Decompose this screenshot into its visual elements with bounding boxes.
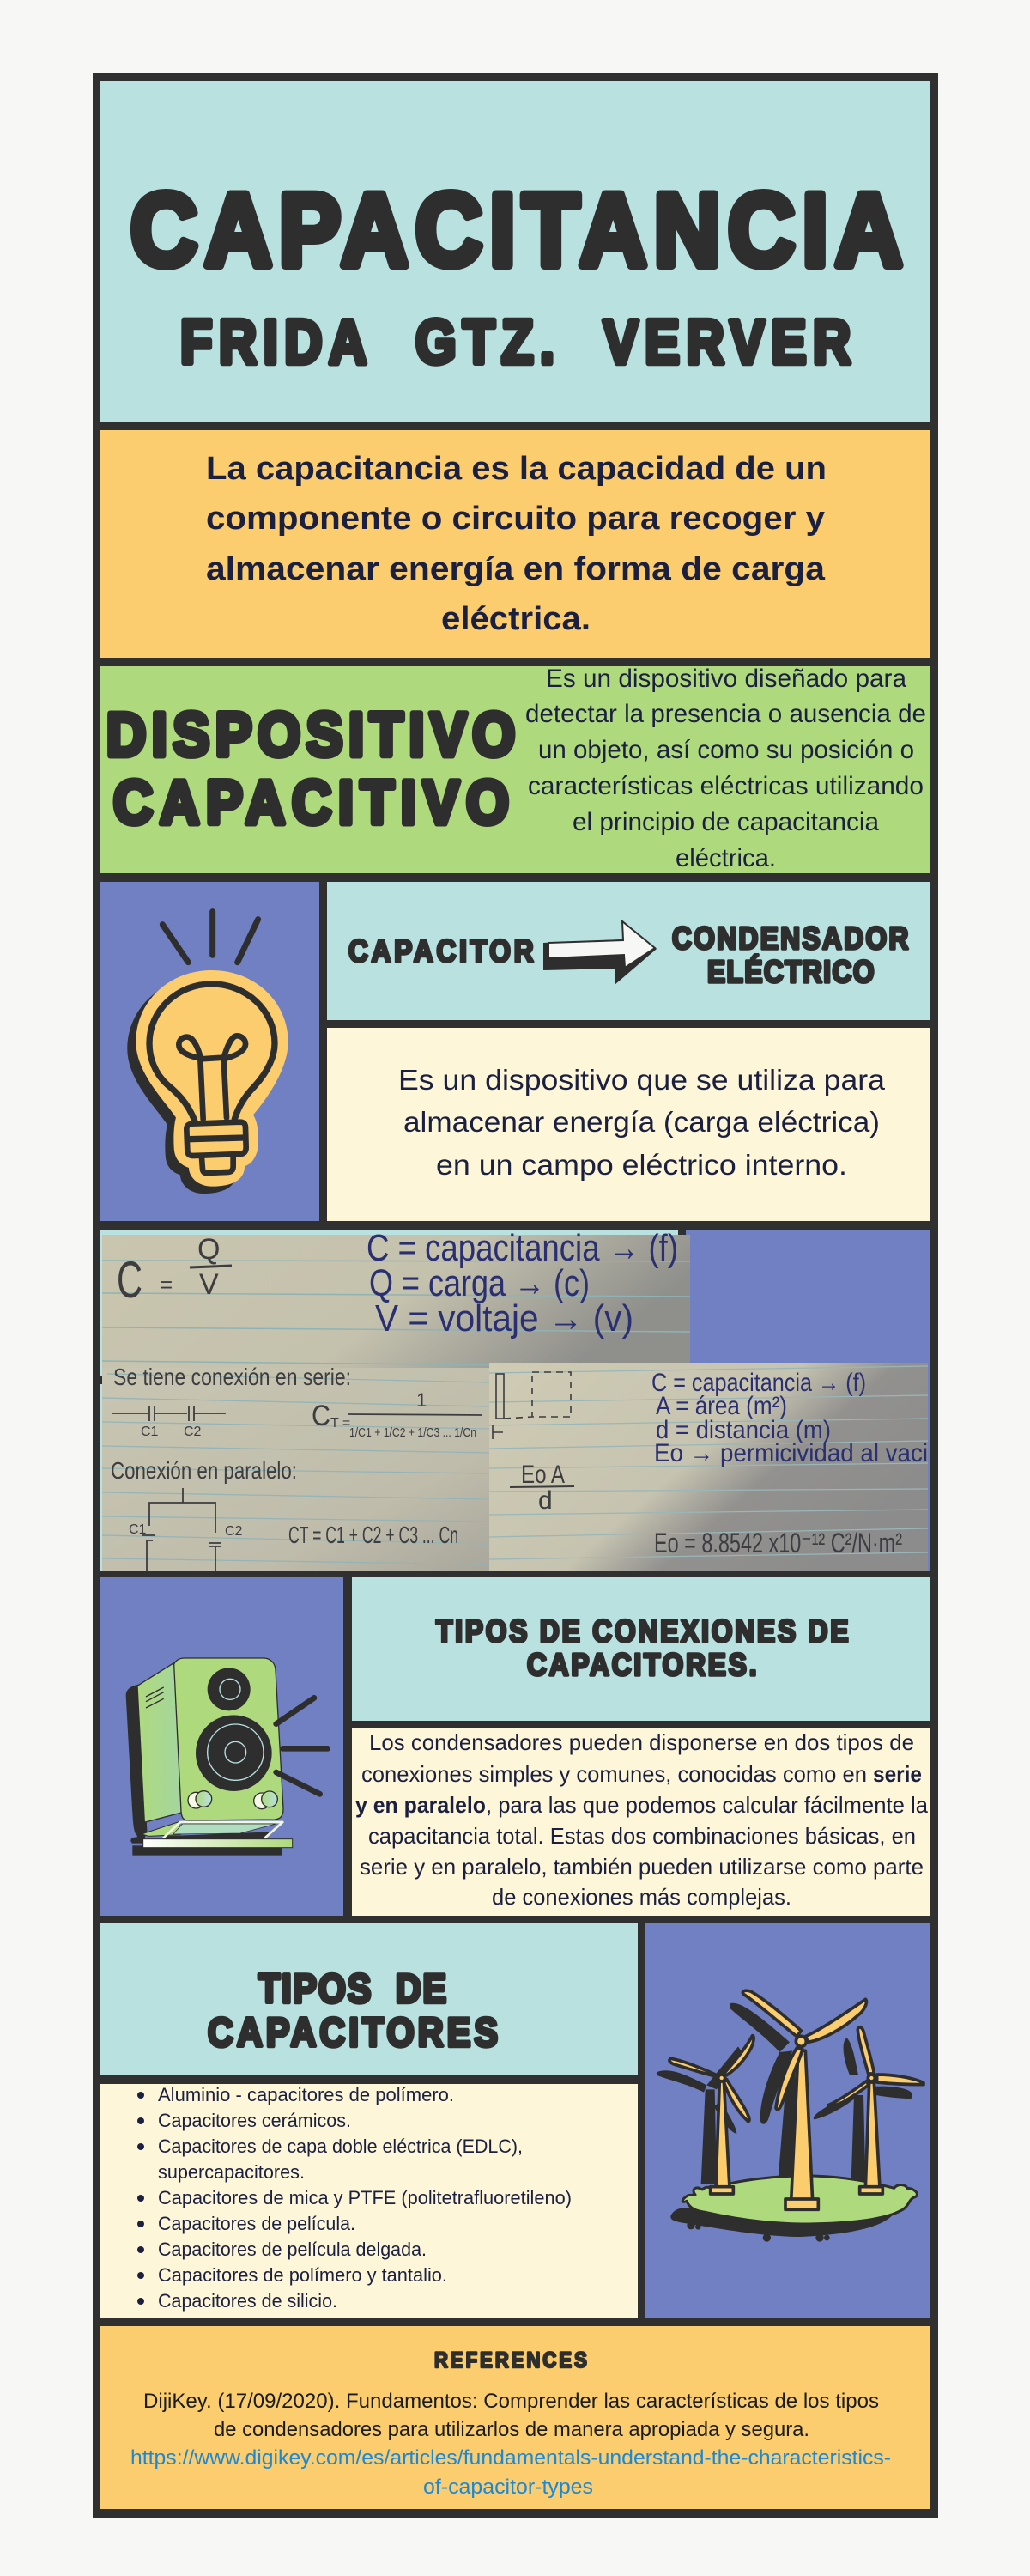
legend: C A d units bbox=[651, 1369, 928, 1467]
definition text: almacenar energía en forma de carga bbox=[206, 551, 826, 587]
formula: C = Q / V bbox=[117, 1233, 232, 1309]
note: series connection: 1/C1 + 1/C2 + 1/C3 ... 1/Cn bbox=[349, 1425, 476, 1440]
legend: C Q V units: Q = carga → (c) bbox=[369, 1262, 590, 1304]
heading: tipos de conexiones: TIPOS DE CONEXIONES DE bbox=[436, 1614, 848, 1649]
panel: formula backgrounds bbox=[93, 1230, 930, 1571]
list items bbox=[158, 2084, 572, 2312]
note: series connection bbox=[112, 1364, 482, 1440]
formula: C = Q / V: C bbox=[117, 1251, 142, 1309]
paragraph bbox=[355, 1729, 929, 1910]
definition text: La capacitancia es la capacidad de un bbox=[206, 451, 827, 487]
icon: light bulb bbox=[127, 912, 288, 1194]
label: condensador electrico bbox=[672, 921, 908, 989]
panel: wind turbines bbox=[645, 1923, 930, 2318]
note: parallel connection: CT = C1 + C2 + C3 ... Cn bbox=[288, 1522, 458, 1548]
list items: supercapacitores. bbox=[158, 2161, 305, 2183]
legend: C Q V units bbox=[367, 1227, 678, 1340]
legend: C A d units: d = distancia (m) bbox=[656, 1416, 831, 1444]
note: series connection: C1 bbox=[141, 1425, 159, 1439]
paragraph: serie y en paralelo, también pueden utilizarse como parte bbox=[360, 1854, 924, 1880]
heading: dispositivo capacitivo bbox=[106, 702, 515, 837]
list items: Capacitores de silicio. bbox=[158, 2290, 337, 2312]
panel: title bbox=[100, 81, 930, 422]
sketch: parallel plates bbox=[493, 1372, 571, 1439]
panel: capacitor description bbox=[327, 1028, 930, 1221]
paragraph: capacitancia total. Estas dos combinaciones básicas, en bbox=[368, 1823, 916, 1849]
heading: tipos de conexiones bbox=[436, 1614, 848, 1682]
citation: de condensadores para utilizarlos de manera apropiada y segura. bbox=[214, 2418, 809, 2441]
paragraph: conexiones simples y comunes, conocidas como en bbox=[361, 1761, 867, 1787]
panel: speaker bbox=[100, 1577, 343, 1916]
paragraph: , para las que podemos calcular fácilmente la bbox=[486, 1792, 929, 1818]
outer dark frame bbox=[93, 73, 938, 2518]
note: parallel connection: C1 bbox=[129, 1522, 147, 1537]
description text: Es un dispositivo que se utiliza para bbox=[398, 1064, 886, 1096]
description text: el principio de capacitancia bbox=[573, 808, 879, 836]
link bbox=[130, 2446, 891, 2499]
icon: speaker bbox=[126, 1658, 328, 1856]
legend: C Q V units: V = voltaje → (v) bbox=[375, 1297, 633, 1340]
citation bbox=[143, 2390, 879, 2441]
description text: almacenar energía (carga eléctrica) bbox=[403, 1106, 880, 1138]
note: parallel connection bbox=[111, 1457, 458, 1571]
panel: light bulb bbox=[100, 882, 319, 1221]
panel: references bbox=[100, 2326, 930, 2509]
note: parallel connection: C2 bbox=[225, 1524, 243, 1539]
heading: references: REFERENCES bbox=[434, 2348, 587, 2372]
panel: dispositivo capacitivo bbox=[100, 665, 930, 873]
formula: Eo A / d bbox=[510, 1461, 574, 1515]
label: condensador electrico: ELÉCTRICO bbox=[707, 955, 874, 989]
list items: Capacitores de mica y PTFE (politetrafluoretileno) bbox=[158, 2187, 572, 2208]
description text: Es un dispositivo diseñado para bbox=[546, 665, 906, 693]
formula: C = Q / V: = bbox=[160, 1272, 173, 1297]
note: series connection: T = bbox=[330, 1416, 350, 1431]
arrow bbox=[543, 921, 657, 985]
photo: series and parallel notes bbox=[102, 1364, 489, 1571]
heading: dispositivo capacitivo: DISPOSITIVO bbox=[106, 702, 515, 769]
description text: eléctrica. bbox=[676, 844, 776, 872]
citation: DijiKey. (17/09/2020). Fundamentos: Comprender las características de los tipos bbox=[143, 2390, 879, 2413]
note: series connection: 1 bbox=[416, 1389, 427, 1411]
panel: definition bbox=[100, 430, 930, 658]
paragraph: Los condensadores pueden disponerse en dos tipos de bbox=[369, 1729, 914, 1755]
panel: capacitor equals condensador bbox=[327, 882, 930, 1020]
label: capacitor: CAPACITOR bbox=[348, 934, 534, 969]
list items: Capacitores de película delgada. bbox=[158, 2239, 427, 2260]
formula: Eo A / d: Eo A bbox=[521, 1461, 565, 1489]
author: FRIDA GTZ. VERVER bbox=[180, 308, 851, 377]
panel: connection types heading bbox=[352, 1577, 930, 1721]
definition text: componente o circuito para recoger y bbox=[206, 501, 825, 537]
heading: tipos de capacitores: TIPOS DE bbox=[258, 1967, 446, 2012]
label: condensador electrico: CONDENSADOR bbox=[672, 921, 908, 956]
legend: C A d units: C = capacitancia → (f) bbox=[651, 1369, 866, 1397]
list items: Capacitores cerámicos. bbox=[158, 2110, 351, 2131]
note: series connection: Se tiene conexión en serie: bbox=[113, 1364, 351, 1390]
heading: dispositivo capacitivo: CAPACITIVO bbox=[113, 769, 509, 837]
link: of-capacitor-types bbox=[423, 2476, 593, 2499]
formula: C = Q / V: Q bbox=[197, 1233, 220, 1266]
paragraph: y en paralelo bbox=[355, 1792, 486, 1818]
bullets bbox=[137, 2092, 144, 2305]
description text bbox=[398, 1064, 886, 1181]
title: CAPACITANCIA bbox=[130, 173, 902, 288]
description text: detectar la presencia o ausencia de bbox=[525, 700, 926, 728]
icon: wind turbines bbox=[657, 1990, 924, 2242]
legend: C Q V units: C = capacitancia → (f) bbox=[367, 1227, 678, 1269]
note: parallel connection: Conexión en paralelo: bbox=[111, 1457, 297, 1484]
photo: parallel plate notes bbox=[489, 1363, 928, 1571]
description text: en un campo eléctrico interno. bbox=[436, 1149, 847, 1181]
list items: Capacitores de polímero y tantalio. bbox=[158, 2264, 447, 2286]
description text bbox=[525, 665, 926, 872]
photo: capacitance formula notes bbox=[102, 1227, 690, 1372]
definition text bbox=[206, 451, 827, 637]
formula: Eo A / d: d bbox=[538, 1486, 553, 1515]
heading: tipos de capacitores: CAPACITORES bbox=[208, 2011, 498, 2056]
note: series connection: C2 bbox=[184, 1425, 202, 1439]
panel: connection types text bbox=[352, 1728, 930, 1916]
link: https://www.digikey.com/es/articles/fundamentals-understand-the-characteristics- bbox=[130, 2446, 891, 2470]
note: series connection: C bbox=[312, 1400, 330, 1432]
heading: tipos de conexiones: CAPACITORES. bbox=[527, 1648, 757, 1682]
list items: Capacitores de película. bbox=[158, 2213, 355, 2234]
legend: C A d units: A = área (m²) bbox=[656, 1392, 787, 1420]
description text: un objeto, así como su posición o bbox=[538, 736, 914, 764]
description text: características eléctricas utilizando bbox=[528, 772, 924, 800]
list items: Aluminio - capacitores de polímero. bbox=[158, 2084, 454, 2105]
legend: C A d units: Eo → permicividad al vaci bbox=[654, 1439, 928, 1467]
definition text: eléctrica. bbox=[441, 601, 591, 637]
formula: C = Q / V: V bbox=[199, 1268, 219, 1301]
panel: capacitor types list bbox=[100, 2084, 638, 2318]
constant: permittivity: Eo = 8.8542 x10⁻¹² C²/N·m² bbox=[654, 1528, 902, 1558]
list items: Capacitores de capa doble eléctrica (EDLC), bbox=[158, 2136, 523, 2157]
panel: capacitor types heading bbox=[100, 1923, 638, 2075]
paragraph: de conexiones más complejas. bbox=[492, 1884, 791, 1910]
heading: tipos de capacitores bbox=[208, 1967, 498, 2056]
paragraph: serie bbox=[873, 1761, 922, 1787]
